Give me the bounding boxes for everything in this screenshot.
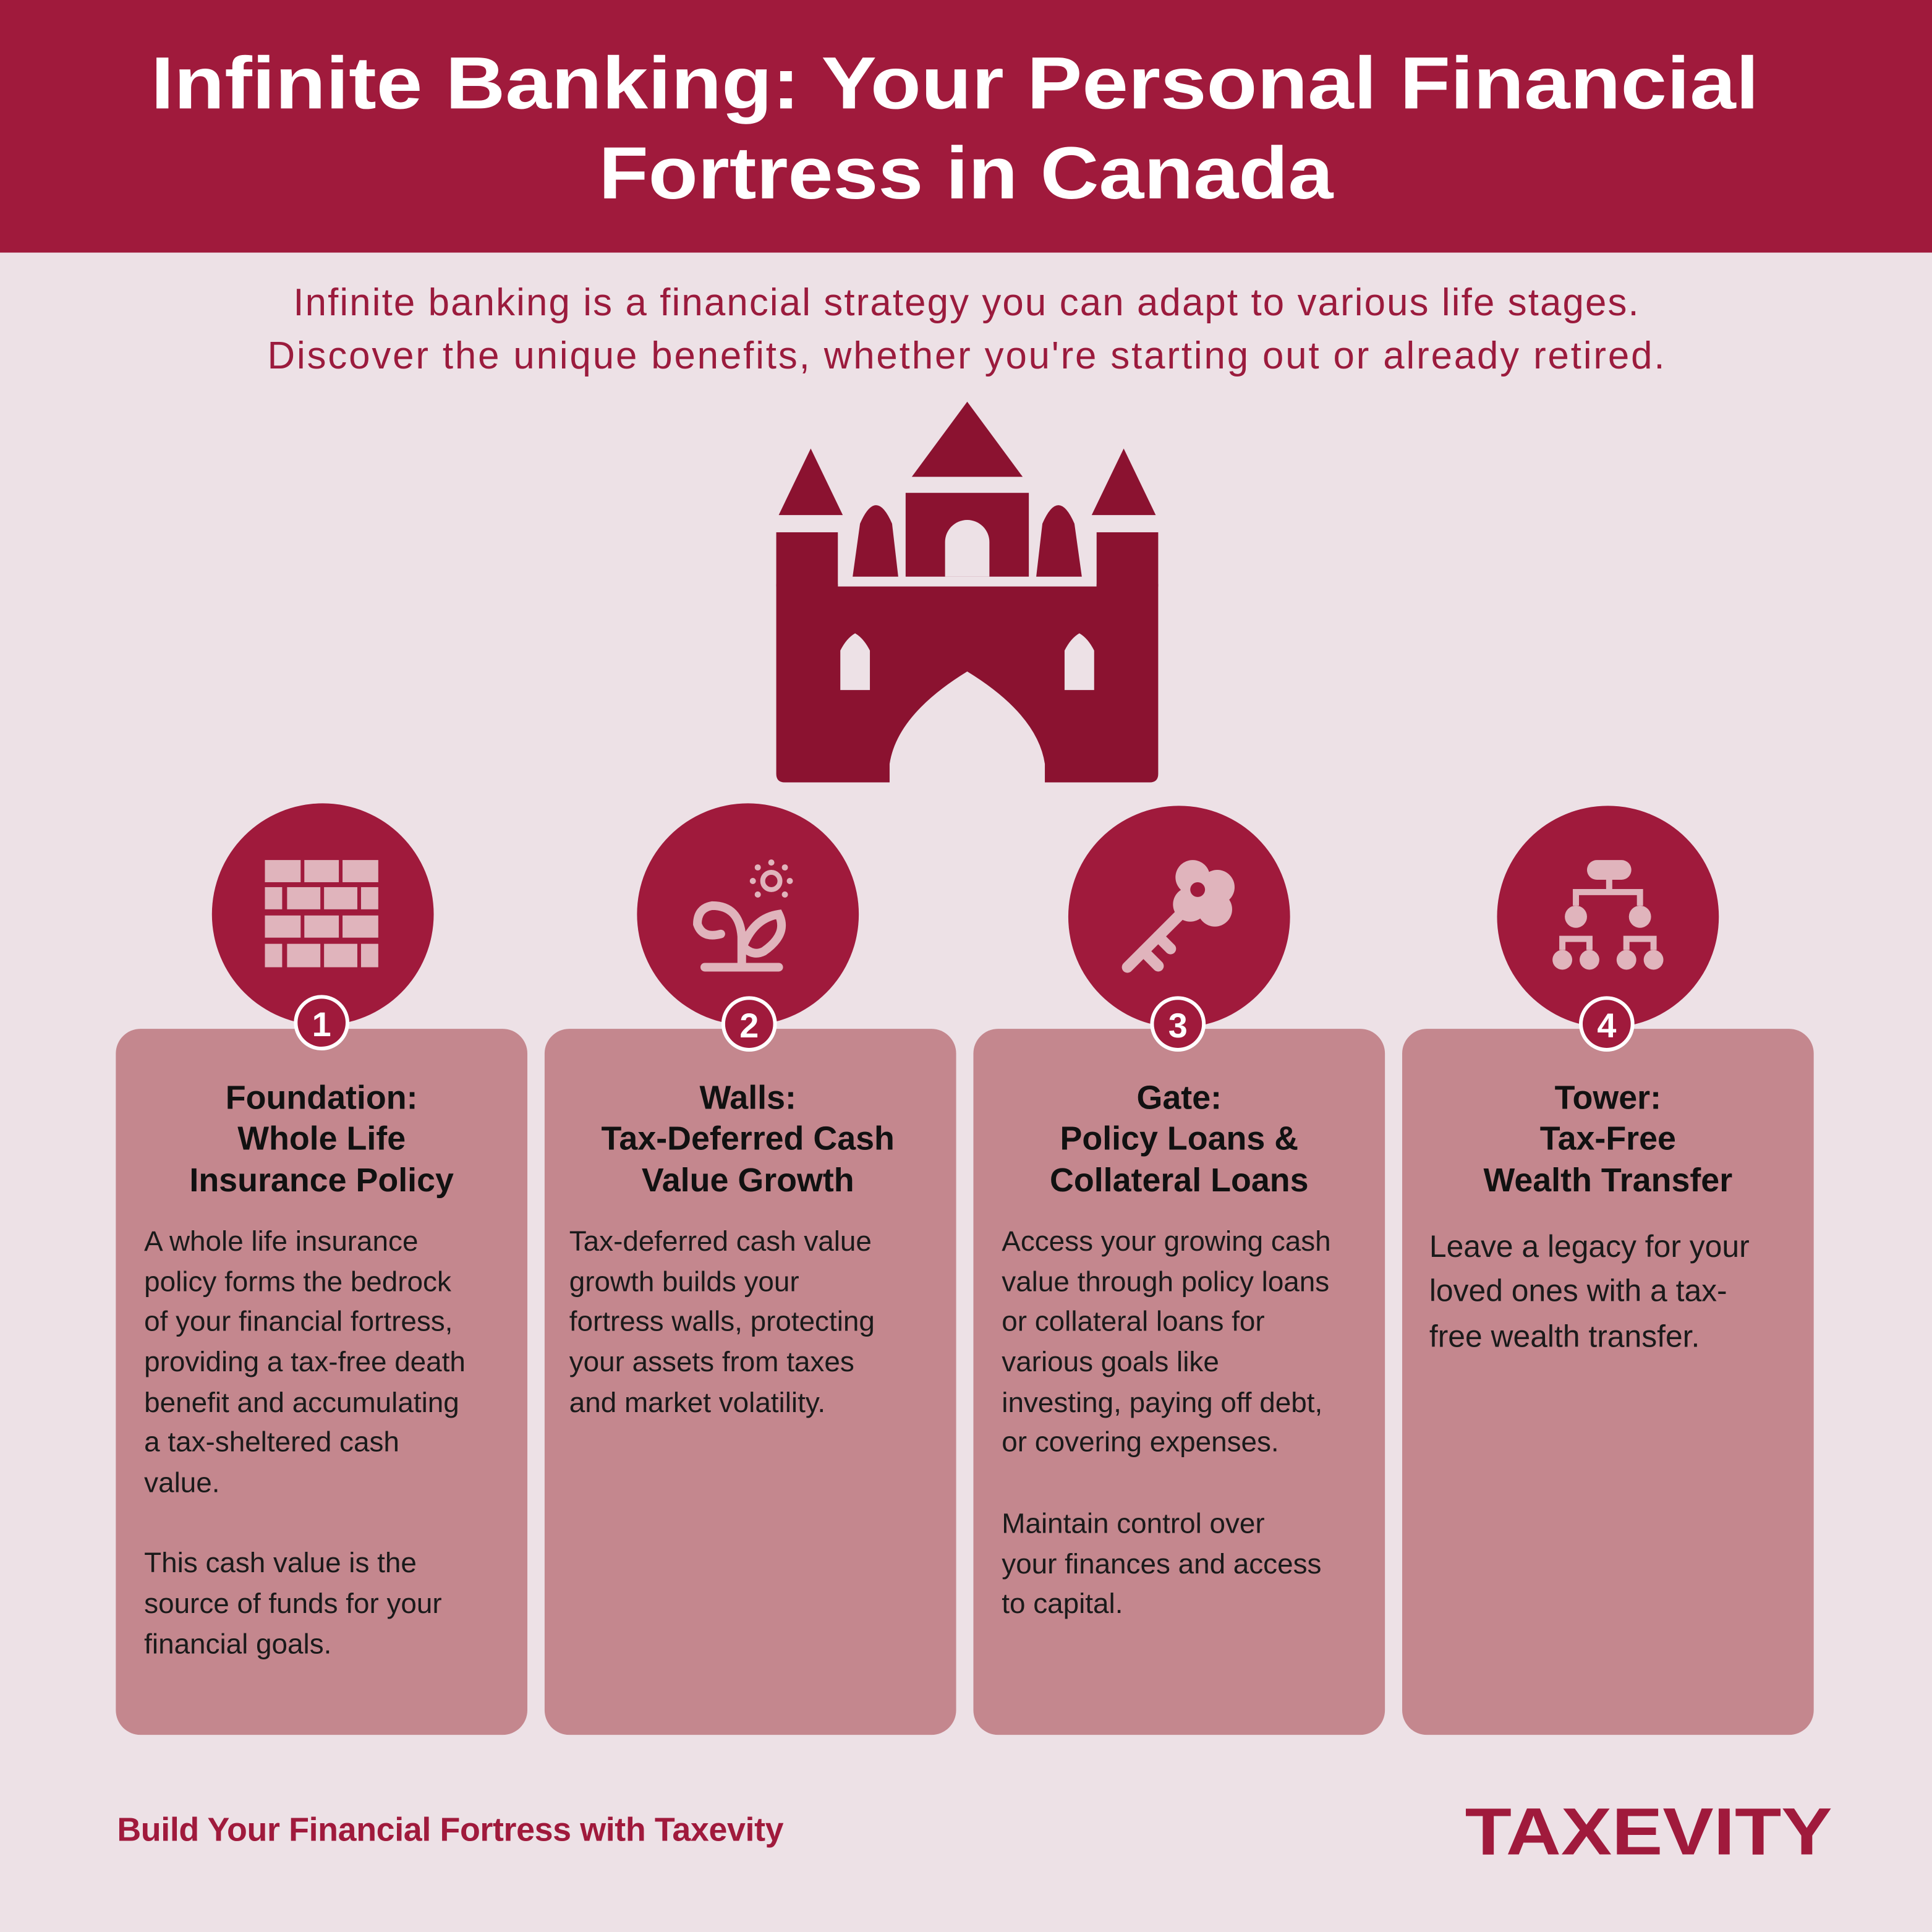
card title: Wealth Transfer <box>1484 1162 1732 1199</box>
icon: castle <box>777 402 1158 783</box>
card body: various goals like <box>1002 1346 1219 1377</box>
card body: or collateral loans for <box>1002 1305 1265 1337</box>
card title: Tower: <box>1555 1079 1661 1117</box>
number badge 3: 3 <box>1168 1006 1188 1045</box>
icon circle: hierarchy <box>1497 806 1719 1028</box>
card title: Walls: <box>700 1079 796 1117</box>
card body: loved ones with a tax- <box>1429 1274 1727 1308</box>
card body: Leave a legacy for your <box>1429 1229 1750 1264</box>
icon circle: key <box>1068 806 1290 1028</box>
card body: to capital. <box>1002 1588 1123 1619</box>
card body: benefit and accumulating <box>144 1387 459 1418</box>
card body: free wealth transfer. <box>1429 1319 1700 1353</box>
card title: Policy Loans & <box>1060 1120 1298 1157</box>
card body: of your financial fortress, <box>144 1305 453 1337</box>
card body <box>1002 1225 1331 1619</box>
subtitle: Discover the unique benefits, whether you're starting out or already retired. <box>267 334 1665 377</box>
card body <box>569 1225 875 1418</box>
card body: A whole life insurance <box>144 1225 418 1257</box>
card title: Foundation: <box>226 1079 418 1117</box>
card title: Gate: <box>1137 1079 1222 1117</box>
number badge 4: 4 <box>1597 1006 1616 1045</box>
subtitle: Infinite banking is a financial strategy you can adapt to various life stages. <box>293 281 1639 324</box>
card body: fortress walls, protecting <box>569 1305 875 1337</box>
card title: Collateral Loans <box>1050 1162 1309 1199</box>
card body: value through policy loans <box>1002 1266 1329 1298</box>
card body: Access your growing cash <box>1002 1225 1331 1257</box>
panel: tower <box>1402 806 1814 1735</box>
subtitle <box>267 281 1665 377</box>
card body: providing a tax-free death <box>144 1346 466 1377</box>
card title <box>602 1079 895 1199</box>
card body: financial goals. <box>144 1628 331 1660</box>
footer tagline: Build Your Financial Fortress with Taxevity <box>117 1811 784 1849</box>
card body: and market volatility. <box>569 1387 825 1418</box>
card body: investing, paying off debt, <box>1002 1387 1322 1418</box>
number badge 1: 1 <box>312 1005 331 1044</box>
card body: Maintain control over <box>1002 1507 1265 1539</box>
card body: your finances and access <box>1002 1548 1321 1580</box>
card body <box>1429 1229 1750 1353</box>
card body: growth builds your <box>569 1266 799 1298</box>
icon circle: brick wall <box>212 803 434 1025</box>
icon circle: plant <box>637 803 859 1025</box>
title: Infinite Banking: Your Personal Financial <box>151 42 1759 124</box>
number badge 3 <box>1152 998 1204 1050</box>
number badge 1 <box>296 997 347 1049</box>
card body: value. <box>144 1467 219 1499</box>
card body: policy forms the bedrock <box>144 1266 451 1298</box>
card title: Whole Life <box>237 1120 406 1157</box>
card title <box>189 1079 454 1199</box>
card body: your assets from taxes <box>569 1346 854 1377</box>
number badge 4 <box>1581 998 1633 1050</box>
card body: This cash value is the <box>144 1547 417 1578</box>
header banner <box>0 0 1932 253</box>
card title <box>1484 1079 1732 1199</box>
card title: Tax-Deferred Cash <box>602 1120 895 1157</box>
card title: Insurance Policy <box>189 1162 454 1199</box>
title line 2: Fortress in Canada <box>599 132 1334 215</box>
card title <box>1050 1079 1309 1199</box>
card title: Value Growth <box>642 1162 854 1199</box>
panel: foundation <box>116 803 527 1735</box>
logo: TAXEVITY: TAXEVITY <box>1465 1794 1832 1868</box>
panel: gate <box>973 806 1385 1735</box>
card body: a tax-sheltered cash <box>144 1426 399 1458</box>
card body: Tax-deferred cash value <box>569 1225 872 1257</box>
card title: Tax-Free <box>1540 1120 1676 1157</box>
card body: source of funds for your <box>144 1588 442 1619</box>
card body <box>144 1225 466 1660</box>
card body: or covering expenses. <box>1002 1426 1279 1458</box>
number badge 2: 2 <box>739 1006 759 1045</box>
panel: walls <box>545 803 956 1735</box>
number badge 2 <box>723 998 775 1050</box>
